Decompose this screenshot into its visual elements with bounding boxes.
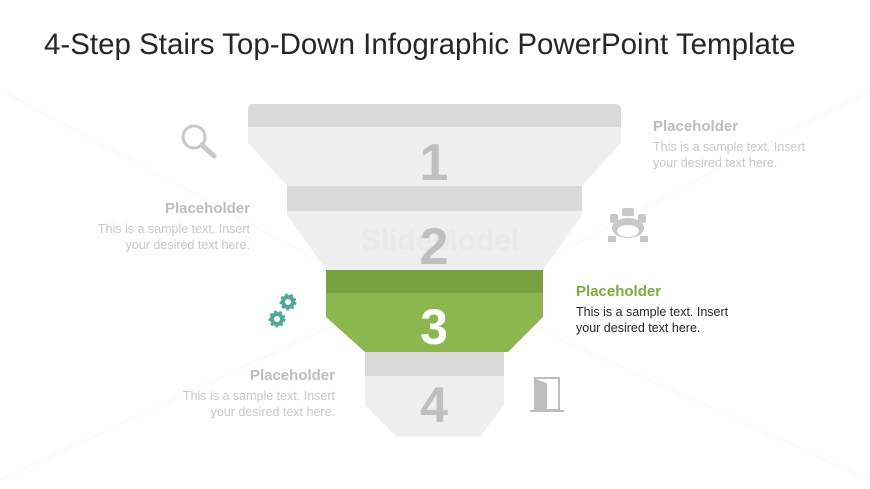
text block 4: This is a sample text. Insert (183, 389, 335, 403)
text block 3: This is a sample text. Insert (576, 305, 728, 319)
text block 1 (653, 118, 805, 170)
text block 4 (183, 367, 335, 419)
step 4 (365, 352, 504, 437)
text block 2: This is a sample text. Insert (98, 222, 250, 236)
text block 2 (98, 200, 250, 252)
step 4: 4 (420, 377, 448, 433)
text block 3: your desired text here. (576, 321, 700, 335)
text block 1: Placeholder (653, 118, 738, 135)
text block 1: your desired text here. (653, 156, 777, 170)
icon: gears (270, 295, 295, 326)
text block 3: Placeholder (576, 283, 661, 300)
icon: door (530, 378, 564, 411)
step 2 (287, 186, 582, 276)
text block 1: This is a sample text. Insert (653, 140, 805, 154)
step 1: 1 (420, 134, 448, 192)
icon: meeting table (608, 208, 648, 242)
title: 4-Step Stairs Top-Down Infographic PowerPoint Template (44, 28, 796, 61)
icon: magnifier (183, 126, 214, 156)
step 1 (248, 104, 621, 192)
step 2: 2 (420, 218, 448, 276)
step 2: SlideModel (361, 224, 519, 257)
text block 4: your desired text here. (211, 405, 335, 419)
text block 3 (576, 283, 728, 335)
step 3: 3 (420, 299, 448, 355)
text block 2: Placeholder (165, 200, 250, 217)
step 3 (326, 270, 543, 355)
text block 2: your desired text here. (126, 238, 250, 252)
text block 4: Placeholder (250, 367, 335, 384)
